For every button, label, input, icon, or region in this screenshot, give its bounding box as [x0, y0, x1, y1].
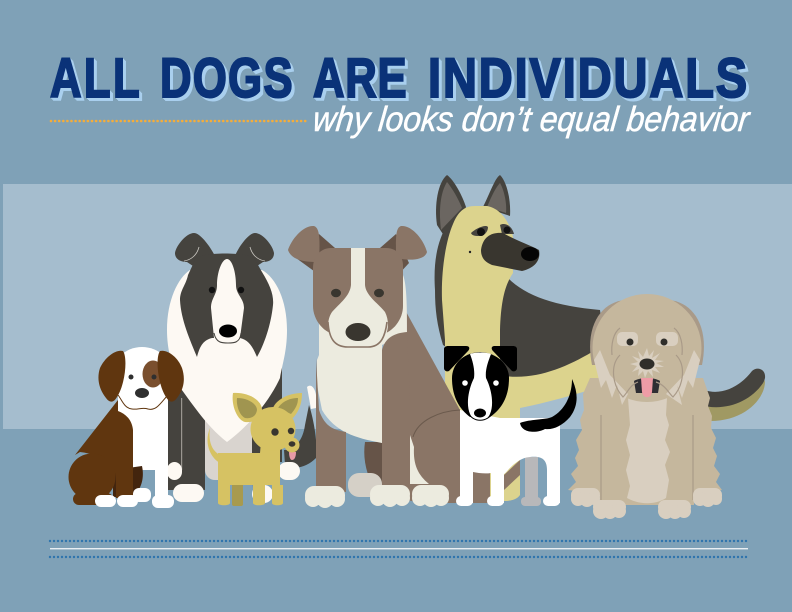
shaggy paws	[571, 488, 722, 519]
spaniel paws	[95, 488, 174, 508]
russell blaze	[468, 352, 492, 421]
brown body	[382, 308, 460, 503]
chihuahua head	[250, 407, 296, 451]
title: INDIVIDUALS	[428, 46, 747, 109]
shaggy leg shading	[601, 415, 693, 500]
dog: shaggy sheepdog	[568, 294, 722, 519]
shaggy eyebrows	[617, 332, 678, 346]
shepherd dark saddle	[435, 225, 610, 390]
spaniel dark hind	[113, 466, 143, 497]
shaggy muzzle lines	[612, 328, 682, 397]
shaggy muzzle star	[630, 348, 664, 378]
collie nose	[219, 324, 237, 338]
collie mane	[167, 270, 287, 442]
shepherd muzzle	[481, 233, 539, 271]
chihuahua tail	[208, 428, 222, 464]
spaniel ears	[98, 351, 184, 402]
front right leg	[382, 332, 410, 492]
shepherd yellow underbelly	[495, 352, 605, 418]
eyes	[331, 289, 384, 297]
russell ears	[444, 346, 517, 371]
title: ARE	[313, 47, 407, 109]
russell tail	[520, 379, 577, 432]
head	[313, 248, 403, 335]
shepherd head and neck	[442, 206, 513, 420]
chihuahua tongue	[289, 452, 296, 460]
shaggy dark fur behind legs	[596, 420, 698, 500]
chihuahua ears	[233, 393, 302, 422]
spaniel white body	[118, 395, 168, 500]
front left leg	[316, 358, 346, 492]
dog: collie	[167, 233, 300, 503]
russell hind fur stripes	[473, 460, 520, 503]
dog: big brown and white dog	[288, 226, 460, 508]
dog: spaniel	[68, 347, 184, 508]
shaggy nose	[640, 358, 654, 370]
shepherd brows and eyes	[469, 224, 514, 253]
title: ALL	[50, 47, 140, 109]
chihuahua far leg	[232, 480, 243, 506]
collie blaze and muzzle	[211, 259, 244, 344]
collie eyes	[209, 287, 244, 293]
shaggy eyes	[626, 338, 668, 346]
footer rules	[50, 541, 748, 557]
russell chin line	[468, 412, 493, 420]
ears	[288, 226, 427, 275]
collie ear highlights	[184, 247, 265, 261]
spaniel brown back	[75, 400, 133, 498]
title	[50, 46, 747, 109]
face blaze and muzzle	[328, 248, 388, 348]
shaggy shaded head rim	[590, 300, 704, 365]
russell paws	[456, 496, 560, 506]
cream chest	[317, 275, 407, 443]
gold dotted rule	[51, 120, 306, 122]
dog: chihuahua	[208, 393, 302, 506]
collie legs	[167, 360, 282, 490]
shepherd hind legs	[488, 450, 541, 506]
collie side paws	[167, 462, 300, 503]
muzzle outline	[328, 322, 387, 347]
shepherd tail	[695, 369, 765, 413]
chihuahua body and legs	[218, 430, 283, 505]
shaggy ear fringe	[594, 350, 700, 405]
russell eyes	[462, 380, 499, 386]
spaniel head	[111, 347, 173, 407]
dog: collie tail	[284, 386, 317, 468]
back leg and paw	[364, 442, 382, 486]
dog: jack russell	[444, 346, 577, 506]
russell head	[452, 352, 509, 417]
shaggy body	[568, 378, 722, 505]
shaggy chest	[626, 398, 670, 503]
shaggy mouth	[634, 378, 660, 393]
spaniel foot	[73, 493, 113, 505]
russell white body and legs	[460, 410, 560, 503]
shaggy tongue	[641, 378, 653, 397]
collie dark face	[180, 254, 273, 357]
spaniel eye patch	[142, 360, 164, 388]
russell nose	[474, 408, 486, 418]
haunch highlight	[413, 410, 460, 437]
shaggy head	[592, 294, 702, 402]
chihuahua snout	[284, 438, 300, 452]
panel: light backdrop	[3, 184, 792, 429]
spaniel haunch	[68, 454, 116, 500]
title: DOGS	[160, 47, 293, 109]
collie mouth line	[214, 333, 241, 343]
shepherd ears	[436, 175, 510, 245]
spaniel mouth	[118, 395, 167, 409]
dog: german shepherd	[435, 175, 765, 506]
collie ears	[175, 233, 274, 268]
chihuahua face	[271, 428, 295, 447]
spaniel eyes	[128, 374, 156, 380]
paws	[305, 485, 449, 508]
subtitle: why looks don’t equal behavior	[311, 100, 752, 139]
nose	[346, 323, 370, 341]
spaniel nose	[135, 388, 149, 398]
shepherd nose	[521, 247, 539, 261]
